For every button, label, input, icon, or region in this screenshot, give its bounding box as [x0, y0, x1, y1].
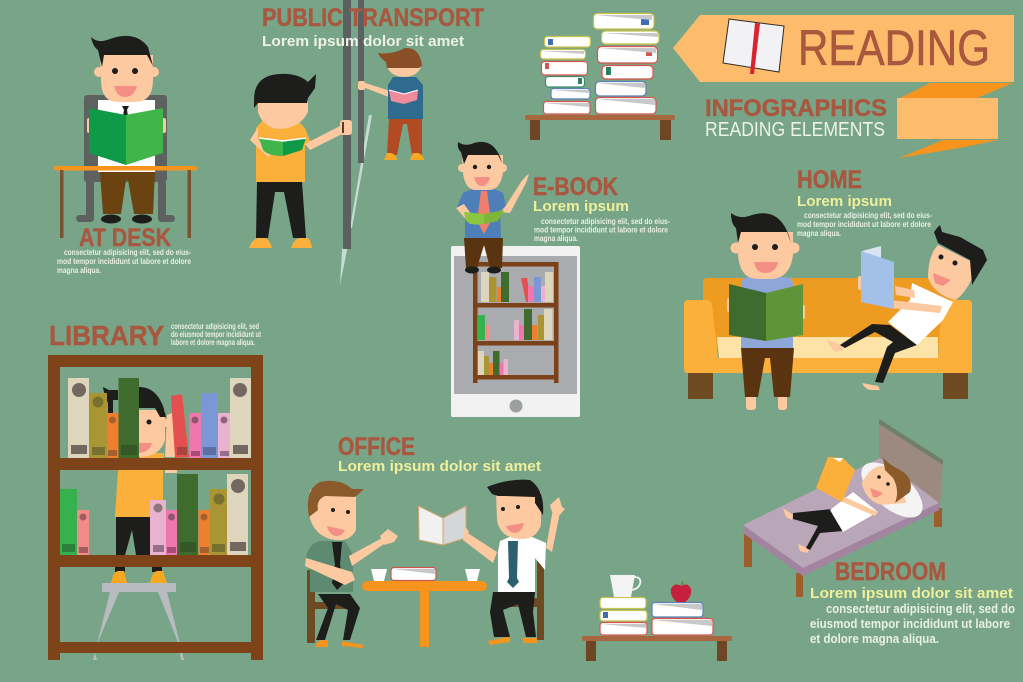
- man left: [305, 481, 398, 648]
- subheading: e-book: Lorem ipsum: [533, 198, 629, 215]
- books: top shelf: [68, 378, 251, 458]
- man lying on sofa: [827, 225, 987, 390]
- subheading: public transport: Lorem ipsum dolor sit amet: [262, 33, 464, 50]
- subheading: office: Lorem ipsum dolor sit amet: [338, 458, 541, 475]
- heading: bedroom: BEDROOM: [835, 558, 946, 586]
- panel: home: [684, 166, 987, 410]
- heading: library: LIBRARY: [49, 320, 164, 351]
- arrow banner: [673, 15, 1014, 82]
- text: bedroom body: eiusmod tempor incididunt ut labore: [810, 617, 1010, 631]
- child reading: [358, 48, 424, 160]
- books: middle shelf: [60, 474, 248, 555]
- subheading: bedroom: Lorem ipsum dolor sit amet: [810, 585, 1013, 602]
- text: e-book body: [534, 217, 670, 243]
- text: home body: magna aliqua.: [797, 229, 841, 238]
- text: at desk body: mod tempor incididunt ut labore et dolore: [57, 257, 191, 266]
- text: bedroom body: [810, 602, 1015, 646]
- shelf frame: [48, 355, 263, 660]
- text: bedroom body: et dolore magna aliqua.: [810, 632, 939, 646]
- text: e-book body: consectetur adipisicing elit, sed do eius-: [541, 217, 670, 226]
- panel: e-book: [451, 142, 670, 417]
- stool: [92, 583, 184, 660]
- chair: [76, 95, 175, 222]
- man sitting on sofa: [727, 213, 805, 410]
- text: library body: labore et dolore magna aliqua.: [171, 338, 255, 347]
- panel: public transport: [249, 0, 484, 285]
- text: e-book body: mod tempor incididunt ut labore et dolore: [534, 226, 668, 234]
- text: home body: [797, 211, 932, 238]
- text: at desk body: [57, 248, 191, 275]
- subheading: home: Lorem ipsum: [797, 193, 892, 210]
- text: at desk body: consectetur adipisicing elit, sed do eius-: [64, 248, 191, 257]
- ribbon: [897, 83, 1013, 158]
- subtitle: infographics: INFOGRAPHICS: [705, 95, 887, 122]
- text: library body: [171, 322, 261, 347]
- person behind shelf: [103, 387, 177, 583]
- panel: at desk: [54, 36, 197, 275]
- small table with books, cup and apple: [582, 575, 732, 661]
- icon: apple: [671, 581, 691, 602]
- table with book and cups: [362, 568, 487, 647]
- small bookshelf: [473, 262, 558, 383]
- text: home body: mod tempor incididunt ut labore et dolore: [797, 220, 931, 229]
- text: library body: do eiusmod tempor incididunt ut: [171, 330, 261, 339]
- heading: at desk: AT DESK: [79, 224, 171, 252]
- title banner: [673, 15, 1014, 158]
- table: [525, 115, 675, 140]
- panel: library: [48, 320, 263, 660]
- title: reading: READING: [798, 20, 990, 76]
- book stack: [600, 598, 713, 635]
- sofa: [684, 278, 972, 399]
- text: e-book body: magna aliqua.: [534, 234, 578, 243]
- man lying on bed: [783, 452, 932, 553]
- subtitle: reading elements: READING ELEMENTS: [705, 119, 885, 141]
- text: at desk body: magna aliqua.: [57, 266, 101, 275]
- panel: office: [305, 433, 565, 648]
- table: [582, 636, 732, 661]
- stacked books on table, top: [525, 14, 675, 140]
- book pile left: [540, 36, 590, 114]
- text: home body: consectetur adipisicing elit, sed do eius-: [804, 211, 932, 220]
- person holding pole: [249, 74, 352, 248]
- man right: [463, 480, 565, 645]
- tablet: [451, 246, 580, 417]
- heading: e-book: E-BOOK: [533, 173, 618, 201]
- icon: open book: [723, 19, 784, 74]
- man sitting on tablet: [456, 142, 529, 274]
- poles: [340, 0, 372, 285]
- man reading at desk: [87, 36, 166, 224]
- heading: office: OFFICE: [338, 433, 415, 461]
- desk: [54, 166, 197, 238]
- heading: home: HOME: [797, 166, 862, 194]
- text: library body: consectetur adipisicing elit, sed: [171, 322, 259, 331]
- bed: [743, 419, 943, 597]
- icon: cup: [610, 575, 640, 597]
- heading: public transport: PUBLIC TRANSPORT: [262, 4, 484, 32]
- book pile right: [594, 14, 659, 114]
- panel: bedroom: [743, 419, 1015, 646]
- open menu: [418, 506, 466, 545]
